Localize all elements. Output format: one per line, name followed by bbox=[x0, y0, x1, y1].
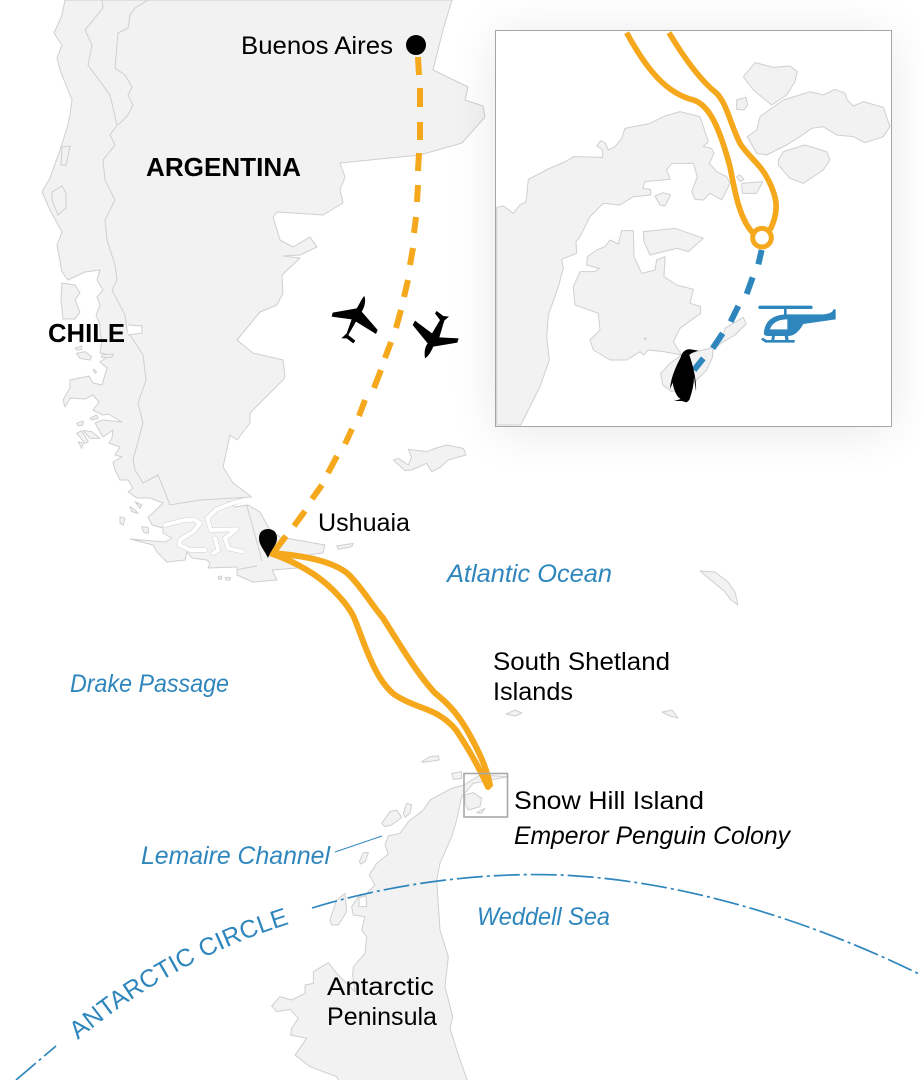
island: Isla de los Estados bbox=[337, 543, 353, 549]
label: South Shetland Islands bbox=[493, 648, 670, 706]
label: Antarctic Circle: ANTARCTIC CIRCLE bbox=[72, 908, 288, 1040]
landmass: South America bbox=[42, 0, 738, 718]
inset land bbox=[497, 63, 890, 425]
label: South Shetland Islands: Islands bbox=[493, 678, 573, 706]
route: flight dashed line bbox=[273, 57, 420, 553]
islands: Magellanic bbox=[120, 502, 230, 580]
label: Snow Hill Island: Snow Hill Island bbox=[514, 787, 704, 815]
inset shadow bbox=[495, 35, 891, 431]
label: Weddell Sea: Weddell Sea bbox=[477, 903, 610, 931]
route: ship loop to Snow Hill bbox=[270, 553, 490, 787]
label: Atlantic Ocean: Atlantic Ocean bbox=[445, 560, 612, 588]
label: Ushuaia: Ushuaia bbox=[318, 509, 410, 537]
Lemaire Channel leader line bbox=[335, 836, 382, 852]
inset stop circle bbox=[753, 228, 771, 247]
label: Antarctic Peninsula bbox=[327, 973, 437, 1031]
island: South Georgia bbox=[700, 571, 738, 605]
landmass: Antarctic Peninsula bbox=[272, 756, 508, 1080]
label: Snow Hill Island bbox=[514, 787, 791, 850]
label: Chile: CHILE bbox=[48, 318, 125, 348]
locator box: Snow Hill bbox=[464, 774, 508, 817]
island: Falkland Islands bbox=[393, 445, 466, 472]
Antarctic Circle line bbox=[16, 875, 921, 1080]
panel: inset map bbox=[496, 30, 892, 426]
borders bbox=[52, 0, 252, 505]
label: Snow Hill Island: Emperor Penguin Colony bbox=[514, 822, 791, 850]
islands: South Shetland bbox=[506, 710, 678, 718]
islands: Patagonian archipelago bbox=[75, 346, 113, 448]
inset route: ship bbox=[627, 33, 776, 233]
fjords of Tierra del Fuego bbox=[165, 498, 262, 569]
label: Drake Passage: Drake Passage bbox=[70, 670, 229, 698]
inset route: helicopter dashed bbox=[694, 250, 762, 370]
label: Antarctic Peninsula: Peninsula bbox=[327, 1003, 437, 1031]
icon: helicopter bbox=[758, 306, 836, 343]
icon: Buenos Aires dot bbox=[406, 35, 426, 55]
label: Antarctic Peninsula: Antarctic bbox=[327, 973, 434, 1001]
label: South Shetland Islands: South Shetland bbox=[493, 648, 670, 676]
island: western Chile bbox=[61, 283, 80, 319]
icon: penguin bbox=[670, 349, 698, 402]
label: Argentina: ARGENTINA bbox=[146, 152, 301, 182]
icon: plane northbound bbox=[332, 296, 378, 343]
icon: plane southbound bbox=[413, 311, 459, 358]
label: Lemaire Channel: Lemaire Channel bbox=[141, 842, 331, 870]
label: Buenos Aires: Buenos Aires bbox=[241, 32, 393, 60]
icon: Ushuaia pin bbox=[259, 529, 277, 558]
